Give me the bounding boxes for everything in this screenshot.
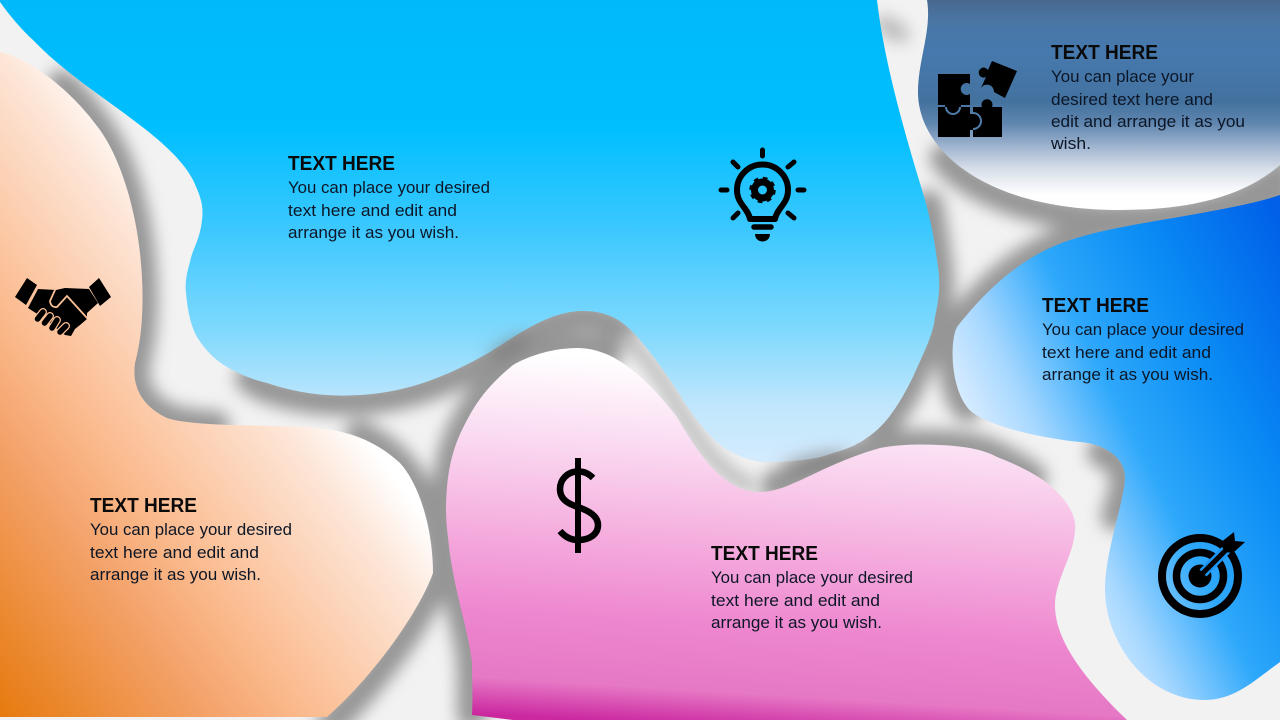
blue blob shape xyxy=(0,0,939,462)
icon: target with arrow xyxy=(1162,532,1245,614)
text block: pink: arrange it as you wish. xyxy=(711,613,882,632)
text block: navy: desired text here and xyxy=(1051,90,1213,109)
soft shadow: light edge and corner xyxy=(628,24,900,486)
text block: pink: You can place your desired xyxy=(711,568,913,587)
text block: orange: arrange it as you wish. xyxy=(90,565,261,584)
text block: bright blue xyxy=(1042,320,1244,384)
bright blue blob shape xyxy=(953,195,1280,700)
text block: bright blue: text here and edit and xyxy=(1042,343,1211,362)
orange blob shape xyxy=(0,52,433,717)
pink blob shape xyxy=(446,348,1127,720)
text block: navy: edit and arrange it as you xyxy=(1051,112,1245,131)
panel: orange xyxy=(0,52,433,717)
icon: puzzle pieces xyxy=(938,61,1017,137)
text block: orange: text here and edit and xyxy=(90,543,259,562)
panel: bright blue right xyxy=(953,195,1280,700)
text block: pink xyxy=(711,568,913,632)
text block: navy: wish. xyxy=(1050,134,1091,153)
text block: blue: You can place your desired xyxy=(288,178,490,197)
heading: bright blue: TEXT HERE xyxy=(1042,295,1149,317)
text block: bright blue: arrange it as you wish. xyxy=(1042,365,1213,384)
icon: lightbulb with gear xyxy=(721,150,804,242)
text block: blue xyxy=(288,178,490,242)
heading: navy: TEXT HERE xyxy=(1051,42,1158,64)
panel: navy top right xyxy=(918,0,1280,210)
text block: navy: You can place your xyxy=(1051,67,1194,86)
heading: orange: TEXT HERE xyxy=(90,495,197,517)
heading: pink: TEXT HERE xyxy=(711,543,818,565)
icon: handshake xyxy=(15,278,111,336)
icon: dollar sign xyxy=(560,458,598,553)
heading: blue: TEXT HERE xyxy=(288,153,395,175)
shadow spots on blue xyxy=(486,331,851,476)
text block: orange: You can place your desired xyxy=(90,520,292,539)
navy blob shape xyxy=(918,0,1280,210)
panel: blue top xyxy=(0,0,939,462)
text block: blue: arrange it as you wish. xyxy=(288,223,459,242)
text block: navy xyxy=(1050,67,1245,153)
text block: bright blue: You can place your desired xyxy=(1042,320,1244,339)
panel: pink bottom xyxy=(446,348,1127,720)
text block: orange xyxy=(90,520,292,584)
text block: pink: text here and edit and xyxy=(711,591,880,610)
text block: blue: text here and edit and xyxy=(288,201,457,220)
